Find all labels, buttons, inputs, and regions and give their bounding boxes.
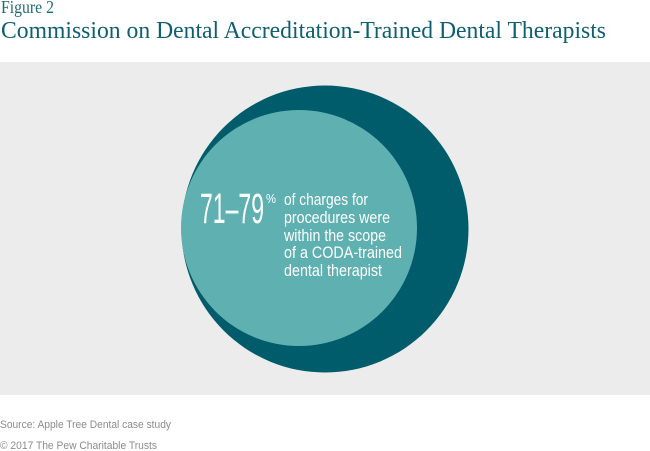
big number: 71–79 <box>200 185 264 233</box>
description <box>283 191 402 280</box>
source note: Source: Apple Tree Dental case study <box>0 419 171 431</box>
callout: statistic <box>200 185 402 280</box>
outer circle: all charges <box>182 86 468 372</box>
description: of a CODA-trained <box>284 244 402 262</box>
description: of charges for <box>284 191 368 209</box>
panel: chart background <box>0 62 650 395</box>
chart: nested circles <box>181 86 468 372</box>
percent sign: % <box>266 191 276 206</box>
description: within the scope <box>283 227 386 245</box>
description: dental therapist <box>284 262 382 280</box>
description: procedures were <box>284 209 390 227</box>
title: Commission on Dental Accreditation-Trained Dental Therapists <box>1 18 606 44</box>
inner circle: share within scope <box>181 110 417 346</box>
